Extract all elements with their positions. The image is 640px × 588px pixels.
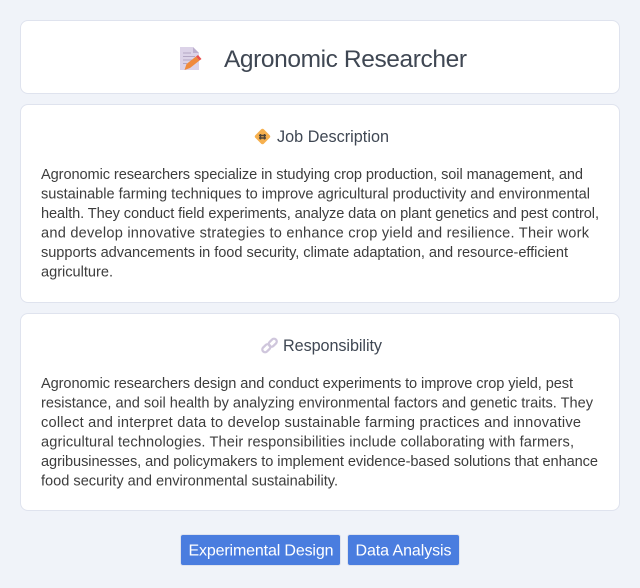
text: responsibility paragraph: resistance, and soil health by analyzing environmental factors and genetic traits. They xyxy=(41,396,594,412)
icon: chain link xyxy=(261,338,278,354)
button: data analysis: Data Analysis xyxy=(356,542,452,560)
button: data analysis xyxy=(347,534,460,566)
text: responsibility paragraph: food security and environmental sustainability. xyxy=(41,474,338,490)
title: Agronomic Researcher xyxy=(224,46,467,73)
text: job description paragraph: agriculture. xyxy=(41,264,113,280)
button: experimental design xyxy=(180,534,341,566)
text: responsibility paragraph: collect and interpret data to develop sustainable farming practices and innovative xyxy=(41,415,581,431)
text: responsibility paragraph: Agronomic researchers design and conduct experiments to improve crop yield, pest xyxy=(41,376,573,392)
text: responsibility paragraph xyxy=(41,376,598,490)
text: job description paragraph: health. They conduct field experiments, analyze data on plant genetics and pest control, xyxy=(41,206,599,222)
panel: job description xyxy=(20,104,620,303)
text: job description paragraph: supports advancements in food security, climate adaptation, and resource-efficient xyxy=(41,245,568,261)
heading: job description: Job Description xyxy=(277,128,389,146)
text: responsibility paragraph: agricultural technologies. Their responsibilities include collaborating with farmers, xyxy=(41,434,574,450)
panel: header xyxy=(20,20,620,94)
text: job description paragraph: and develop innovative strategies to enhance crop yield and resilience. Their work xyxy=(41,226,590,242)
icon: document with pencil xyxy=(180,47,202,70)
icon: construction diamond xyxy=(254,128,270,144)
panel: responsibility xyxy=(20,313,620,511)
button: experimental design: Experimental Design xyxy=(188,542,334,560)
text: responsibility paragraph: agribusinesses, and policymakers to implement evidence-based solutions that enhance xyxy=(41,454,598,470)
heading: responsibility: Responsibility xyxy=(283,337,383,355)
text: job description paragraph: Agronomic researchers specialize in studying crop production, soil management, and xyxy=(41,167,583,183)
text: job description paragraph: sustainable farming techniques to improve agricultural productivity and environmental xyxy=(41,186,590,202)
text: job description paragraph xyxy=(41,167,599,280)
